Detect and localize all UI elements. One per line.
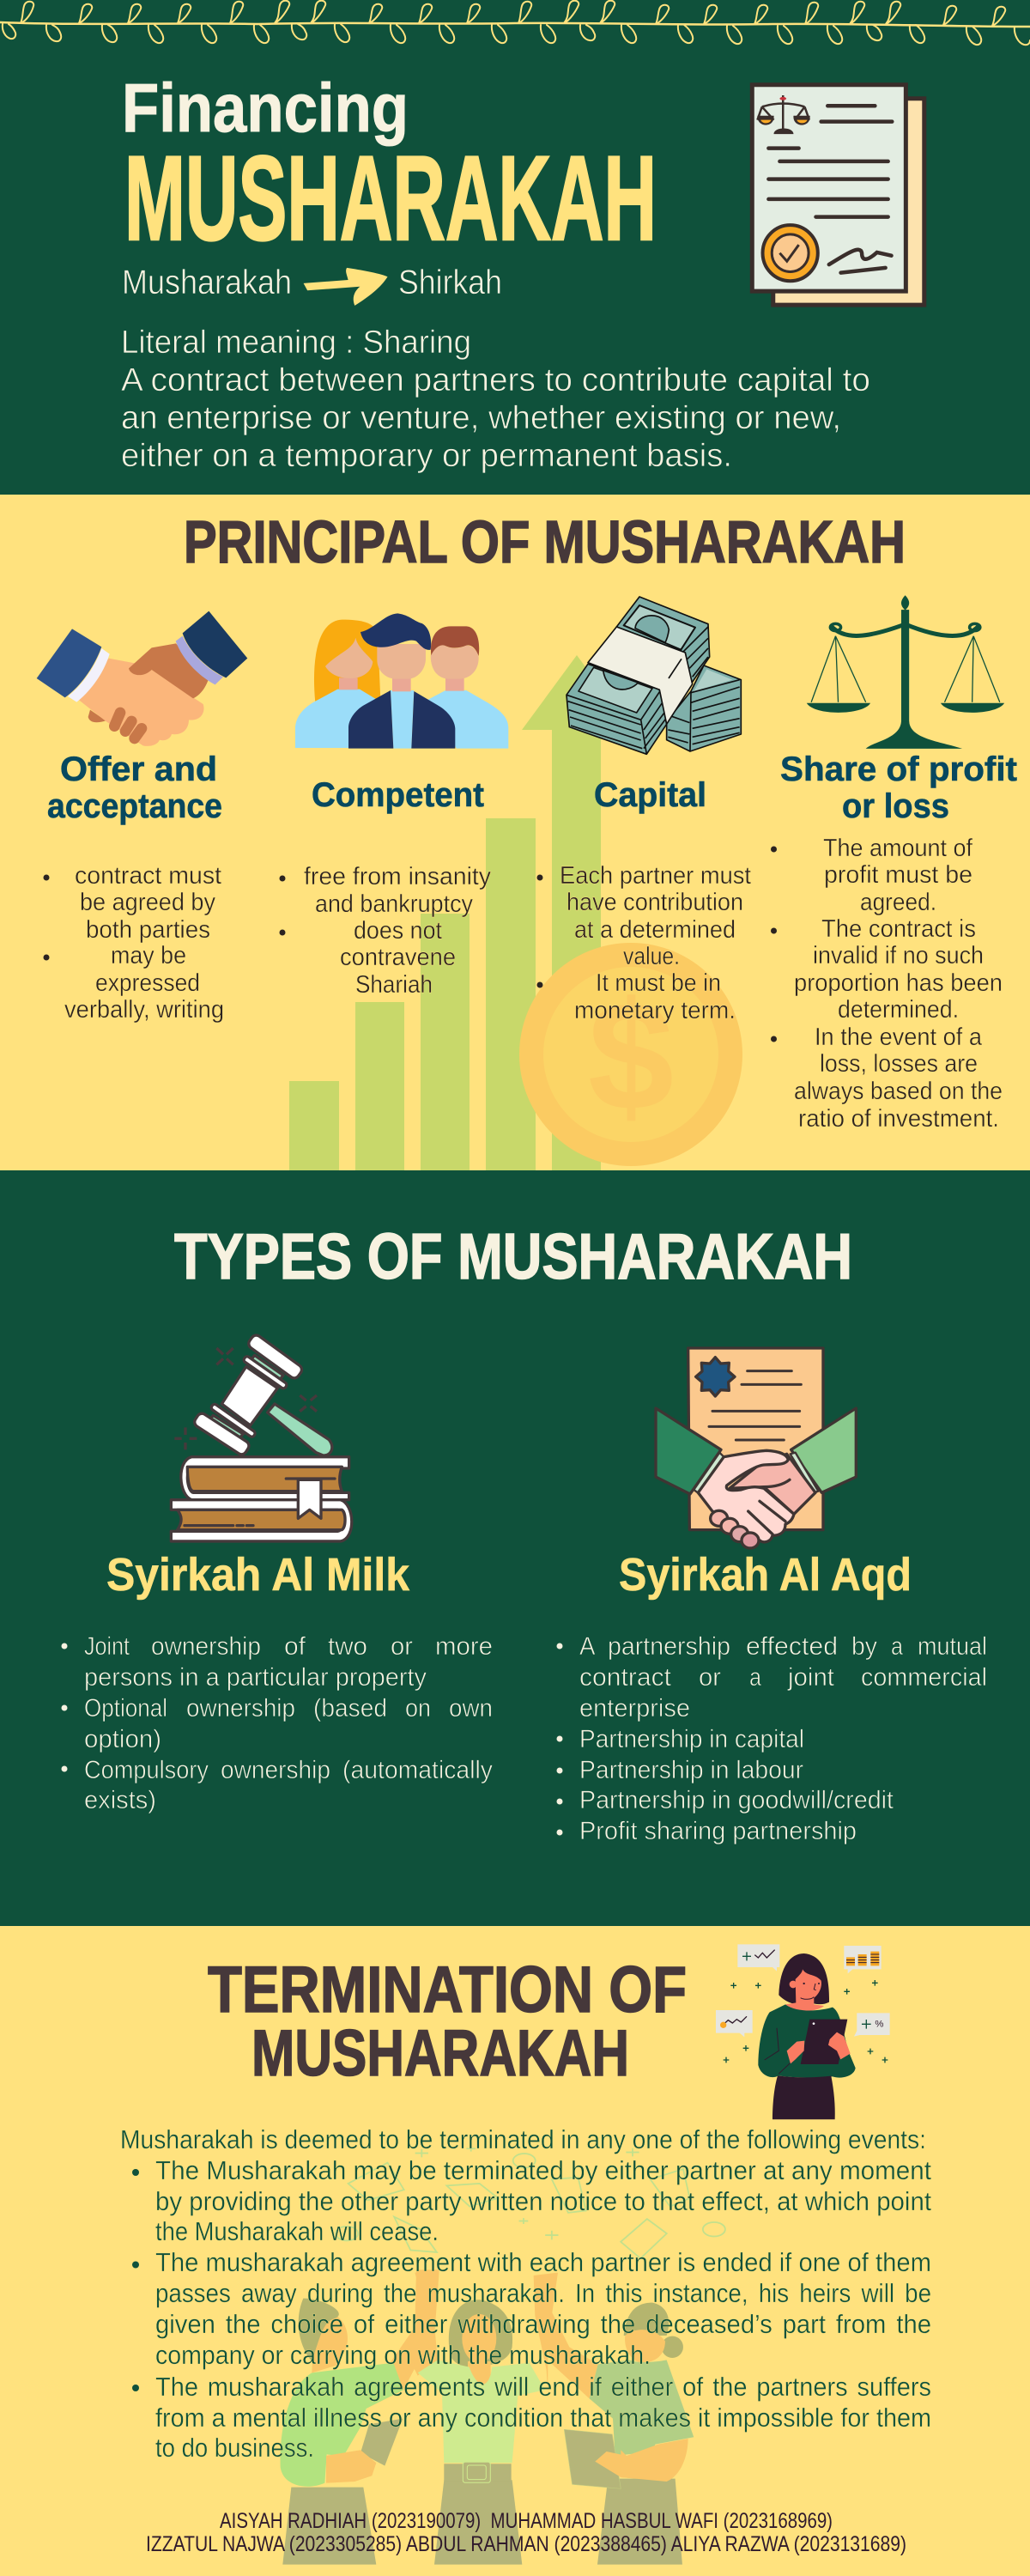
- bullet list: Syirkah Al Milk: Joint: [84, 1632, 130, 1661]
- bullet list: verbally, writing: [64, 996, 224, 1024]
- subheading: acceptance: [47, 787, 222, 825]
- label: Musharakah: Musharakah: [122, 264, 292, 301]
- bullet list: Syirkah Al Aqd: mutual: [918, 1632, 987, 1661]
- chart: background growth bars and arrow: [289, 655, 632, 1170]
- bullet list: free from insanity: [304, 863, 491, 890]
- bullet list: [280, 863, 491, 999]
- bullet list: Syirkah Al Aqd: by: [851, 1632, 877, 1661]
- bullet list: termination events: The Musharakah may be terminated by either partner at any moment: [155, 2155, 931, 2185]
- subheading: Offer and: [60, 750, 217, 788]
- bullet list: always based on the: [794, 1078, 1003, 1105]
- bullet list: In the event of a: [815, 1024, 983, 1051]
- bullet list: determined.: [838, 996, 959, 1024]
- bullet list: [537, 862, 751, 1024]
- bullet list: Syirkah Al Milk: (automatically: [342, 1756, 493, 1784]
- subheading: or loss: [842, 787, 949, 825]
- bullet list: Syirkah Al Aqd: commercial: [861, 1663, 987, 1692]
- bullet list: Syirkah Al Milk: (based: [313, 1694, 387, 1722]
- heading: MUSHARAKAH: [251, 2017, 629, 2090]
- bullet list: Syirkah Al Aqd: Partnership in capital: [579, 1725, 804, 1753]
- text block: definition: Literal meaning : Sharing: [121, 325, 471, 361]
- bullet list: Syirkah Al Milk: of: [284, 1632, 306, 1661]
- subheading: [780, 750, 1017, 825]
- footer: authors: AISYAH RADHIAH (2023190079) MUHAMMAD HASBUL WAFI (2023168969): [220, 2509, 833, 2533]
- icon: woman with tablet and charts: [716, 1944, 890, 2119]
- bullet list: Syirkah Al Aqd: effected: [746, 1632, 838, 1661]
- illustration: faint team of three people: [281, 2269, 694, 2565]
- bullet list: termination events: [132, 2155, 931, 2463]
- bullet list: Syirkah Al Aqd: contract: [579, 1663, 672, 1692]
- bullet list: Syirkah Al Milk: two: [328, 1632, 367, 1661]
- column 1: offer and acceptance: [43, 750, 224, 1024]
- column 2: competent: [280, 776, 491, 999]
- bullet list: does not: [354, 917, 442, 945]
- bullet list: expressed: [95, 969, 200, 997]
- panel: types of musharakah: [0, 1170, 1030, 1926]
- bullet list: Syirkah Al Aqd: a: [891, 1632, 903, 1661]
- bullet list: Syirkah Al Milk: Compulsory: [84, 1756, 209, 1784]
- bullet list: profit must be: [824, 861, 972, 889]
- icon: contract and handshake: [656, 1348, 856, 1548]
- bullet list: Syirkah Al Milk: own: [449, 1694, 493, 1722]
- bullet list: [771, 835, 1003, 1133]
- heading: [208, 1953, 687, 2090]
- bullet list: Syirkah Al Aqd: A: [579, 1632, 596, 1661]
- text block: definition: [121, 325, 870, 474]
- bullet list: Syirkah Al Aqd: a: [749, 1663, 761, 1692]
- bullet list: Syirkah Al Aqd: [556, 1632, 987, 1845]
- bullet list: Syirkah Al Milk: ownership: [221, 1756, 330, 1784]
- bullet list: at a determined: [574, 916, 736, 944]
- icon: gavel and books: [171, 1334, 352, 1541]
- subheading: Syirkah Al Aqd: Syirkah Al Aqd: [619, 1549, 912, 1601]
- bullet list: termination events: from a mental illness or any condition that makes it impossible for them: [155, 2403, 931, 2433]
- bullet list: [43, 862, 224, 1024]
- bullet list: invalid if no such: [813, 942, 984, 969]
- icon: partners group: [295, 613, 508, 749]
- bullet list: loss, losses are: [820, 1050, 978, 1078]
- bullet list: Syirkah Al Milk: exists): [84, 1786, 156, 1814]
- bullet list: contravene: [340, 944, 456, 971]
- bullet list: termination events: to do business.: [155, 2433, 314, 2463]
- bullet list: Syirkah Al Milk: option): [84, 1725, 161, 1753]
- icon: contract document: [752, 85, 924, 305]
- bullet list: termination events: by providing the other party written notice to that effect, at which point: [155, 2186, 931, 2216]
- bullet list: be agreed by: [80, 889, 215, 916]
- bullet list: have contribution: [566, 889, 743, 916]
- bullet list: Syirkah Al Milk: Optional: [84, 1694, 167, 1722]
- icon: background coin: $: [588, 970, 674, 1143]
- bullet list: contract must: [75, 862, 221, 890]
- bullet list: termination events: The musharakah agreements will end if either of the partners suffers: [155, 2372, 931, 2402]
- subheading: Competent: [312, 776, 484, 814]
- subheading: Capital: [594, 776, 706, 814]
- bullet list: and bankruptcy: [315, 890, 473, 918]
- bullet list: Each partner must: [560, 862, 751, 890]
- bullet list: Syirkah Al Milk: [62, 1632, 493, 1814]
- heading: PRINCIPAL OF MUSHARAKAH: [184, 508, 906, 575]
- subheading: Share of profit: [780, 750, 1017, 788]
- title: Financing: Financing: [122, 70, 409, 146]
- bullet list: Syirkah Al Aqd: joint: [787, 1663, 835, 1692]
- middle person: [412, 2271, 558, 2565]
- column 4: share of profit or loss: [771, 750, 1017, 1133]
- bullet list: Syirkah Al Milk: more: [435, 1632, 493, 1661]
- bullet list: Syirkah Al Milk: ownership: [186, 1694, 295, 1722]
- bullet list: ratio of investment.: [798, 1105, 999, 1133]
- subheading: Syirkah Al Milk: Syirkah Al Milk: [106, 1549, 410, 1601]
- decorative vine garland: [0, 1, 1030, 45]
- bullet list: Syirkah Al Milk: or: [391, 1632, 413, 1661]
- bullet list: proportion has been: [794, 969, 1003, 997]
- bullet list: Syirkah Al Aqd: Partnership in goodwill/credit: [579, 1786, 894, 1814]
- bullet list: termination events: given the choice of either withdrawing the deceased’s part from the: [155, 2309, 931, 2339]
- panel: termination of musharakah: [0, 1926, 1030, 2576]
- icon: money stacks: [566, 597, 741, 754]
- bullet list: termination events: The musharakah agreement with each partner is ended if one of them: [155, 2247, 931, 2277]
- bullet list: termination events: company or carrying on with the musharakah.: [155, 2340, 651, 2370]
- bullet list: agreed.: [860, 889, 936, 916]
- subheading: [47, 750, 222, 825]
- icon: woman with tablet and charts: %: [875, 2020, 883, 2030]
- label: Shirkah: Shirkah: [398, 264, 502, 301]
- bullet list: It must be in: [596, 969, 721, 997]
- bullet list: Syirkah Al Milk: ownership: [151, 1632, 261, 1661]
- bullet list: Syirkah Al Aqd: or: [699, 1663, 721, 1692]
- bullet list: monetary term.: [574, 997, 736, 1024]
- bullet list: Syirkah Al Aqd: Partnership in labour: [579, 1756, 803, 1784]
- intro sentence: Musharakah is deemed to be terminated in any one of the following events:: [120, 2124, 926, 2154]
- bullet list: Syirkah Al Milk: persons in a particular property: [84, 1663, 427, 1692]
- arrow: [304, 268, 388, 306]
- left person: [281, 2269, 439, 2565]
- heading: TYPES OF MUSHARAKAH: [174, 1220, 852, 1292]
- icon: handshake: [37, 611, 247, 746]
- bullet list: termination events: passes away during the musharakah. In this instance, his heirs will be: [155, 2278, 931, 2308]
- illustration: faint money icons: [336, 2146, 725, 2258]
- footer: authors: [146, 2509, 906, 2556]
- text block: definition: A contract between partners to contribute capital to: [121, 362, 870, 398]
- panel: header: [0, 0, 1030, 495]
- bullet list: Syirkah Al Aqd: enterprise: [579, 1694, 690, 1722]
- icon: background coin: [519, 943, 742, 1166]
- column 3: capital: [537, 776, 751, 1024]
- right person: [536, 2303, 694, 2565]
- bullet list: value.: [623, 943, 680, 970]
- text block: definition: an enterprise or venture, whether existing or new,: [121, 400, 841, 436]
- bullet list: Syirkah Al Milk: on: [405, 1694, 431, 1722]
- bullet list: The amount of: [823, 835, 973, 862]
- bullet list: both parties: [86, 916, 210, 944]
- heading: TERMINATION OF: [208, 1953, 687, 2026]
- bullet list: Syirkah Al Aqd: partnership: [608, 1632, 730, 1661]
- title: MUSHARAKAH: MUSHARAKAH: [124, 131, 657, 265]
- bullet list: The contract is: [821, 915, 976, 943]
- bullet list: Shariah: [355, 971, 433, 999]
- bullet list: may be: [111, 942, 186, 969]
- bullet list: termination events: the Musharakah will cease.: [155, 2216, 439, 2246]
- panel: principal of musharakah: [0, 495, 1030, 1170]
- text block: definition: either on a temporary or permanent basis.: [121, 438, 732, 474]
- icon: balance scale: [807, 595, 1004, 749]
- footer: authors: IZZATUL NAJWA (2023305285) ABDUL RAHMAN (2023388465) ALIYA RAZWA (2023131689): [146, 2532, 906, 2556]
- bullet list: Syirkah Al Aqd: Profit sharing partnership: [579, 1817, 857, 1845]
